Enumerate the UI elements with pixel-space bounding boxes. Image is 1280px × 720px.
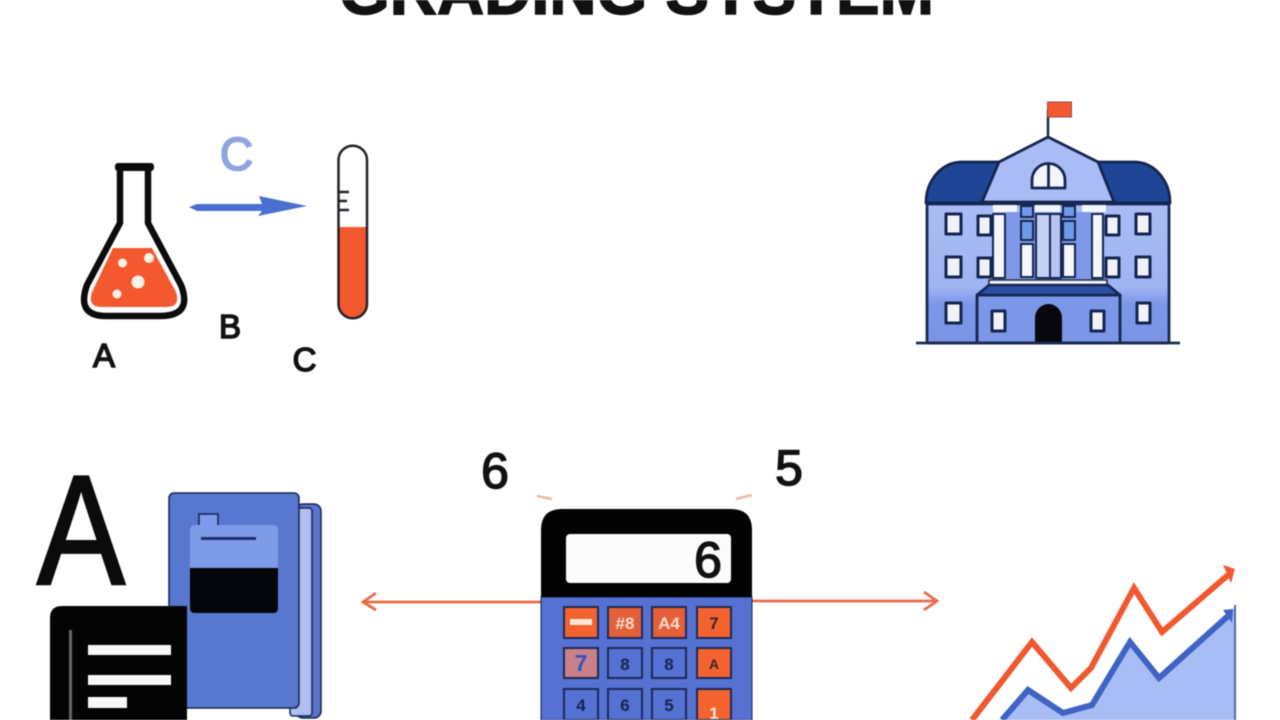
key labels: #8 xyxy=(616,614,634,633)
icon: flask xyxy=(84,163,184,316)
label: B: B xyxy=(219,308,241,345)
flag xyxy=(1048,102,1072,138)
arrow: flask to tube xyxy=(189,196,307,216)
area fill xyxy=(1002,608,1234,720)
walls xyxy=(927,204,1169,343)
key labels: 7 xyxy=(575,650,587,676)
decorative marks above calculator xyxy=(537,495,752,499)
key labels: 5 xyxy=(664,696,674,715)
display: 6 xyxy=(694,532,722,588)
portico xyxy=(977,280,1120,343)
keys xyxy=(564,607,731,720)
number 6: 6 xyxy=(481,443,509,499)
book xyxy=(169,493,321,718)
axis xyxy=(1234,605,1236,720)
key labels: 4 xyxy=(576,696,586,715)
key labels: 8 xyxy=(664,655,674,674)
key labels: A4 xyxy=(658,614,680,633)
document xyxy=(50,606,187,720)
ground line xyxy=(916,342,1180,344)
icon: calculator xyxy=(541,509,752,720)
label: light C: C xyxy=(220,128,253,180)
arrow: left xyxy=(363,593,541,610)
icon: chemistry set xyxy=(84,128,367,378)
key labels: 8 xyxy=(620,655,630,674)
key labels: A xyxy=(709,656,719,672)
blue trend line xyxy=(1002,609,1233,720)
arched window xyxy=(1032,164,1065,188)
key labels xyxy=(570,614,719,720)
roof wings xyxy=(926,162,1170,203)
icon: university building xyxy=(916,102,1180,343)
letter A: A xyxy=(37,444,125,618)
windows xyxy=(946,214,1150,323)
key labels: 6 xyxy=(620,696,630,715)
display xyxy=(566,532,731,588)
colonnade xyxy=(993,205,1106,279)
icon: letter grade and books xyxy=(37,444,321,720)
label: A: A xyxy=(93,337,115,374)
icon: test tube xyxy=(338,146,367,318)
key labels: 7 xyxy=(709,614,719,633)
label: C: C xyxy=(293,341,316,378)
line chart xyxy=(972,565,1235,720)
number 5: 5 xyxy=(775,440,803,496)
orange trend line xyxy=(972,565,1235,720)
arrow: right xyxy=(752,592,937,610)
pediment xyxy=(982,137,1114,202)
